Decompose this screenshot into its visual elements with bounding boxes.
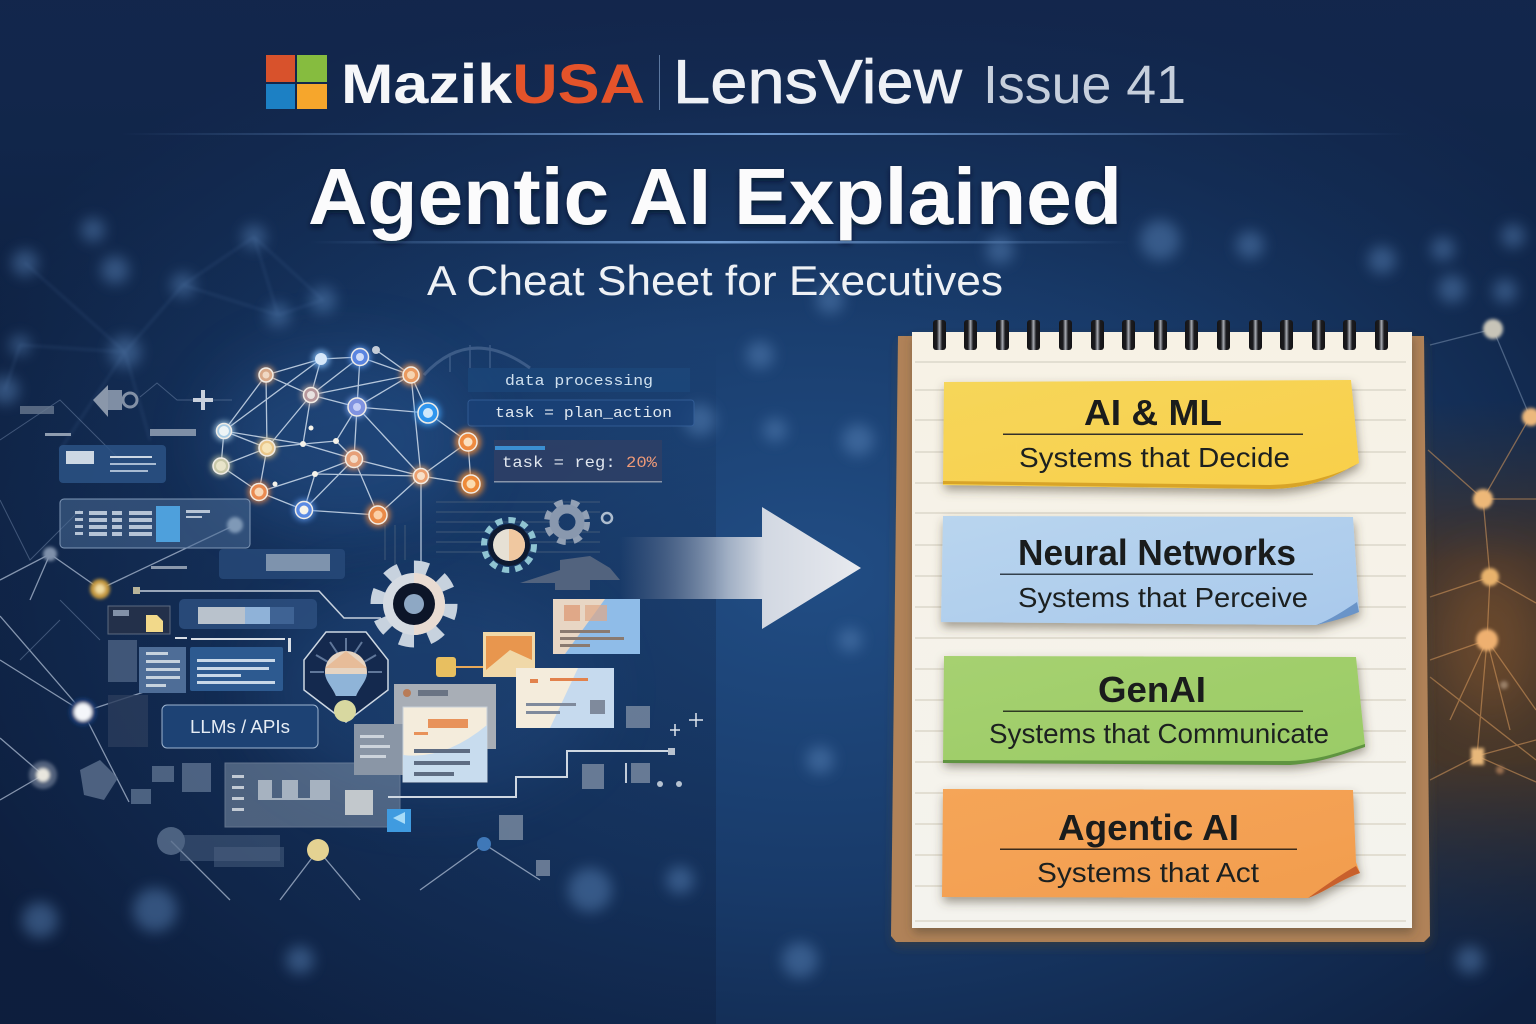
subtitle: A Cheat Sheet for Executives: [427, 257, 1003, 304]
connector line: [133, 587, 381, 618]
window cluster: [354, 599, 640, 782]
notebook: [891, 320, 1430, 942]
panel: data processing: [468, 368, 690, 392]
sticky note: AI & ML: AI & ML: [1084, 392, 1222, 433]
panel: data processing: data processing: [505, 373, 653, 390]
panel: task reg: [494, 440, 662, 482]
panel: data table: [60, 499, 250, 548]
sticky note: GenAI: [943, 656, 1365, 765]
brand name: Mazik USA: [341, 52, 645, 115]
dark circuit lines behind gears: [385, 502, 600, 570]
panel: list cards: [108, 640, 283, 693]
sticky note: GenAI: GenAI: [1098, 669, 1206, 710]
sticky note: Agentic AI: Systems that Act: [1037, 857, 1259, 888]
neural network: [211, 346, 484, 630]
bokeh particles: [0, 218, 1525, 978]
right side network: [1428, 319, 1536, 782]
paper: [912, 332, 1412, 928]
window: front: [403, 707, 487, 782]
panel: task reg: task = reg: 20%: [502, 454, 657, 472]
gear: main: [377, 567, 451, 641]
issue number: Issue 41: [983, 55, 1186, 115]
decorative squares left: [80, 695, 284, 867]
icon: lightbulb in polygon: [304, 632, 388, 722]
background network top-left: [5, 237, 323, 450]
window: side card: [354, 724, 404, 775]
panel: task plan action: [468, 400, 694, 426]
sticky note: AI & ML: Systems that Decide: [1019, 442, 1290, 473]
gear: ring: [484, 520, 534, 570]
sticky note: Agentic AI: [942, 789, 1360, 898]
cardboard backing: [891, 336, 1430, 942]
sticky note: AI & ML: [943, 380, 1359, 489]
left side network lines and nodes: [0, 383, 540, 900]
window: orange image: [483, 632, 535, 677]
panel: task plan action: task = plan_action: [495, 405, 672, 422]
arch behind network: [424, 345, 530, 375]
sticky note: Neural Networks: Neural Networks: [1018, 532, 1296, 573]
window: orange blue: [553, 599, 640, 654]
sticky note: Neural Networks: Systems that Perceive: [1018, 582, 1308, 613]
panel: dashboard left top: [59, 445, 166, 483]
sticky note: Neural Networks: [941, 516, 1359, 625]
sparkles: [670, 713, 703, 736]
decorative squares right: [499, 706, 682, 876]
panel: LLMs / APIs: LLMs / APIs: [190, 717, 290, 737]
panel: LLMs / APIs: [162, 705, 318, 748]
panel: gold tile: [108, 606, 170, 634]
gold and blue nodes: [307, 837, 491, 861]
arrow: [620, 507, 861, 629]
gear: small: [548, 503, 612, 541]
panel: bottom chart: [225, 763, 411, 832]
top-left decorative icons: [20, 385, 213, 436]
white short line: [175, 637, 291, 652]
code panels: [468, 368, 694, 482]
header logo: [266, 48, 1186, 117]
title: Agentic AI Explained: [308, 152, 1122, 241]
panel: status bar: [151, 549, 345, 579]
factory silhouette: [520, 556, 620, 590]
glow block: [436, 657, 483, 677]
window: cream panel: [516, 668, 614, 728]
spiral rings: [933, 320, 1388, 350]
icon: four square logo: [266, 55, 327, 109]
LensView: LensView: [673, 48, 962, 117]
window: grey back: [394, 684, 496, 749]
panel: progress bar: [179, 599, 317, 629]
sticky note: GenAI: Systems that Communicate: [989, 718, 1329, 749]
circuit line: [388, 748, 675, 797]
sticky note: Agentic AI: Agentic AI: [1058, 807, 1239, 848]
